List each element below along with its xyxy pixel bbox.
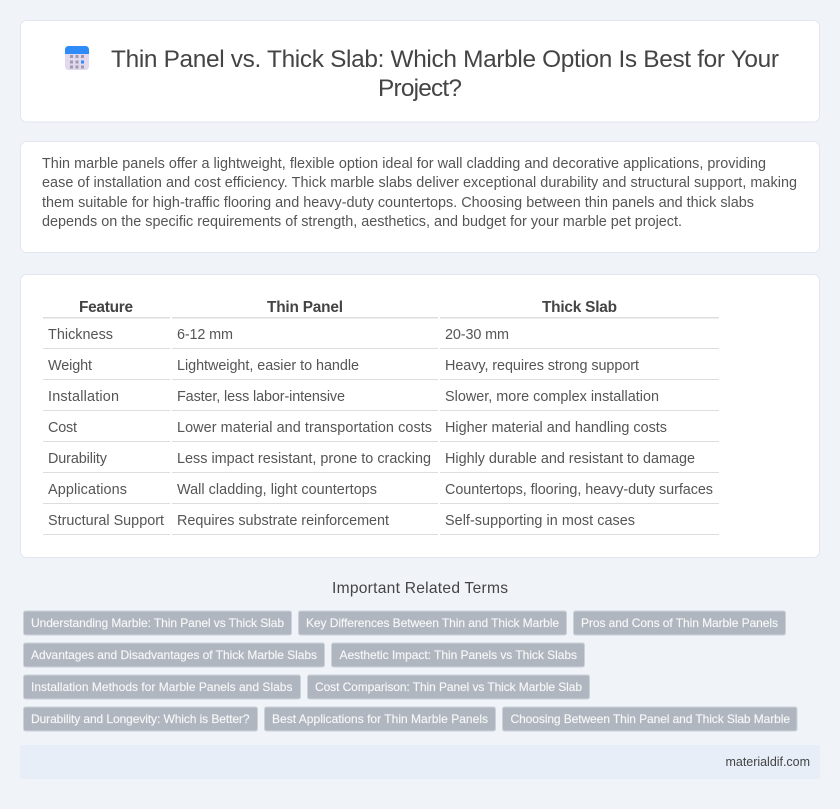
tag [24, 675, 300, 699]
row: thickness: Thickness [48, 327, 113, 343]
related terms tags [24, 611, 797, 731]
row: applications: Applications [48, 482, 127, 498]
row: cost: Lower material and transportation costs [177, 420, 432, 436]
tag [24, 611, 292, 635]
row: installation [43, 389, 719, 411]
tag [574, 611, 786, 635]
row: structural support: Structural Support [48, 513, 164, 529]
title: Project? [378, 75, 462, 102]
row: weight: Weight [48, 358, 92, 374]
intro paragraph: depends on the specific requirements of strength, aesthetics, and budget for your marble pet project. [42, 214, 682, 230]
tag [502, 707, 797, 731]
heading: important related terms: Important Related Terms [332, 580, 508, 597]
title [111, 46, 779, 102]
title: Thin Panel vs. Thick Slab: Which Marble Option Is Best for Your [111, 46, 779, 73]
row: installation: Slower, more complex installation [445, 389, 659, 405]
intro paragraph [42, 156, 797, 230]
tag [24, 643, 324, 667]
row: durability: Durability [48, 451, 108, 467]
tag: Choosing Between Thin Panel and Thick Slab Marble [510, 712, 790, 726]
icon: calendar [65, 46, 89, 70]
row: structural support [43, 513, 719, 535]
tag: Understanding Marble: Thin Panel vs Thick Slab [31, 616, 284, 630]
tag: Best Applications for Thin Marble Panels [272, 712, 488, 726]
table header row: Thick Slab [542, 299, 617, 316]
row: thickness: 20-30 mm [445, 327, 509, 343]
tag [24, 707, 258, 731]
table header row: Thin Panel [267, 299, 343, 316]
tag: Key Differences Between Thin and Thick Marble [306, 616, 559, 630]
row: installation: Faster, less labor-intensive [177, 389, 345, 405]
panel: introduction [20, 142, 820, 252]
row: cost: Cost [48, 420, 77, 436]
row: thickness [43, 327, 719, 349]
row: structural support: Self-supporting in most cases [445, 513, 635, 529]
tag [298, 611, 566, 635]
row: cost: Higher material and handling costs [445, 420, 667, 436]
row: applications: Countertops, flooring, heavy-duty surfaces [445, 482, 713, 498]
row: cost [43, 420, 719, 442]
row: structural support: Requires substrate reinforcement [177, 513, 389, 529]
row: applications: Wall cladding, light countertops [177, 482, 377, 498]
tag [264, 707, 496, 731]
row: installation: Installation [48, 389, 119, 405]
table header row [43, 299, 719, 318]
row: durability: Less impact resistant, prone to cracking [177, 451, 431, 467]
row: weight [43, 358, 719, 380]
tag: Advantages and Disadvantages of Thick Marble Slabs [31, 648, 317, 662]
tag: Installation Methods for Marble Panels and Slabs [31, 680, 292, 694]
table header row: Feature [79, 299, 133, 316]
tag: Pros and Cons of Thin Marble Panels [581, 616, 778, 630]
intro paragraph: Thin marble panels offer a lightweight, flexible option ideal for wall cladding and decorative applications, providing [42, 156, 766, 172]
tag: Cost Comparison: Thin Panel vs Thick Marble Slab [315, 680, 582, 694]
row: durability [43, 451, 719, 473]
intro paragraph: ease of installation and cost efficiency. Thick marble slabs deliver exceptional durability and structural support, making [42, 175, 797, 191]
tag: Aesthetic Impact: Thin Panels vs Thick Slabs [340, 648, 577, 662]
row: thickness: 6-12 mm [177, 327, 233, 343]
intro paragraph: them suitable for high-traffic flooring and heavy-duty countertops. Choosing between thin panels and thick slabs [42, 195, 754, 211]
tag: Durability and Longevity: Which is Better? [31, 712, 250, 726]
row: durability: Highly durable and resistant to damage [445, 451, 695, 467]
tag [308, 675, 590, 699]
panel: comparison table [20, 274, 820, 558]
tag [332, 643, 584, 667]
footer bar [20, 745, 820, 779]
row: weight: Lightweight, easier to handle [177, 358, 359, 374]
footer bar: materialdif.com [726, 755, 810, 769]
row: applications [43, 482, 719, 504]
row: weight: Heavy, requires strong support [445, 358, 639, 374]
panel: title header [20, 20, 820, 122]
